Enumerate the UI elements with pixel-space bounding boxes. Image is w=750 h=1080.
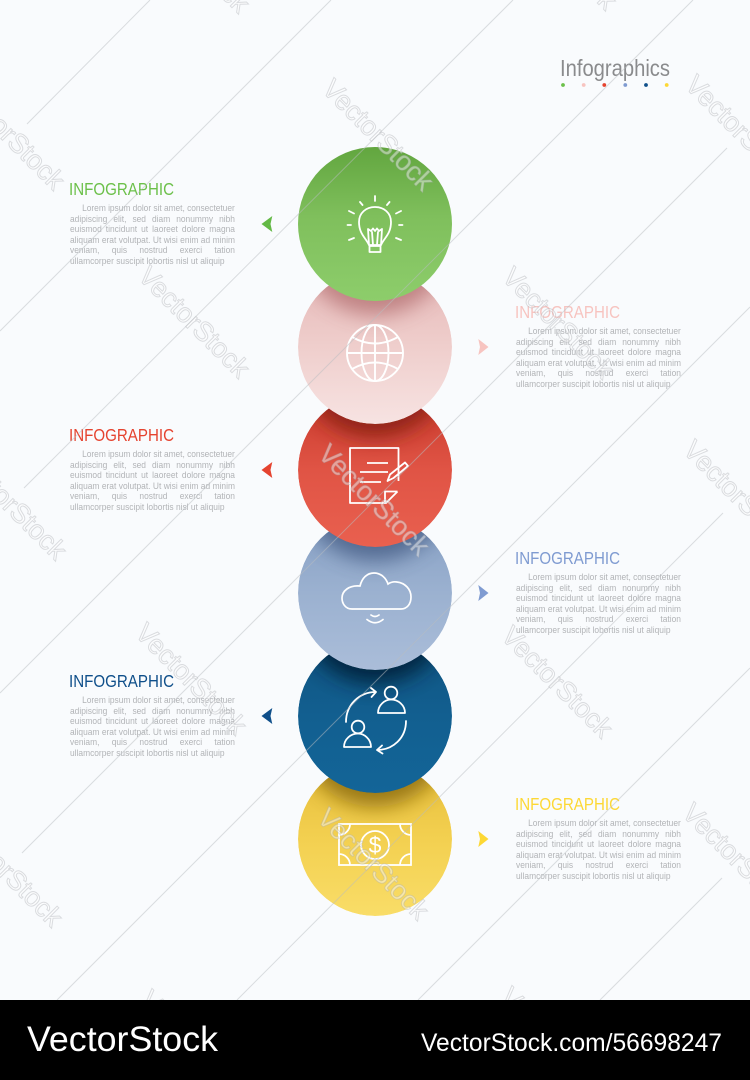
watermark overlay: VectorStock <box>312 438 436 562</box>
watermark overlay: VectorStock <box>129 617 253 741</box>
watermark overlay: VectorStock <box>316 73 440 197</box>
icon: light bulb <box>348 196 402 252</box>
text block: pink: euismod tincidunt ut laoreet dolore magna <box>516 347 680 357</box>
text block: yellow <box>514 794 681 881</box>
text block: yellow: aliquam erat volutpat. Ut wisi enim ad minim <box>516 850 680 860</box>
text block: red: euismod tincidunt ut laoreet dolore magna <box>70 470 234 480</box>
text: INFOGRAPHIC <box>514 794 620 814</box>
text block: pink: veniam, quis nostrud exerci tation <box>516 368 680 378</box>
text block: red: aliquam erat volutpat. Ut wisi enim ad minim <box>70 481 234 491</box>
text block: blue: aliquam erat volutpat. Ut wisi enim ad minim <box>516 604 680 614</box>
header title: Infographics <box>560 55 670 81</box>
icon: document with pencil <box>350 448 408 503</box>
footer bar: VectorStock <box>27 1020 219 1059</box>
text block: pink: ullamcorper suscipit lobortis nisl ut aliquip <box>516 379 670 389</box>
footer bar: VectorStock.com/56698247 <box>421 1029 722 1057</box>
text block: green: Lorem ipsum dolor sit amet, consectetuer <box>82 203 234 213</box>
circle: green bulb <box>298 147 452 301</box>
text block: pink: aliquam erat volutpat. Ut wisi enim ad minim <box>516 358 680 368</box>
text block: navy: veniam, quis nostrud exerci tation <box>70 737 234 747</box>
circle: red document <box>298 408 452 547</box>
text: INFOGRAPHIC <box>68 179 174 199</box>
arrow: blue <box>478 585 488 601</box>
text block: blue <box>514 548 681 635</box>
circle: yellow money <box>298 778 452 916</box>
text: INFOGRAPHIC <box>514 302 620 322</box>
arrow: yellow <box>478 831 488 847</box>
text block: yellow: adipiscing elit, sed diam nonummy nibh <box>516 829 680 839</box>
text: INFOGRAPHIC <box>68 671 174 691</box>
text block: yellow: Lorem ipsum dolor sit amet, consectetuer <box>528 818 680 828</box>
text block: pink: Lorem ipsum dolor sit amet, consectetuer <box>528 326 680 336</box>
text block: navy <box>68 671 235 758</box>
circle: blue cloud <box>298 532 452 670</box>
text block: blue: adipiscing elit, sed diam nonummy nibh <box>516 583 680 593</box>
text block: blue: euismod tincidunt ut laoreet dolore magna <box>516 593 680 603</box>
text block: green <box>68 179 235 266</box>
text block: green: veniam, quis nostrud exerci tation <box>70 245 234 255</box>
text: INFOGRAPHIC <box>68 425 174 445</box>
circle: pink globe <box>298 286 452 424</box>
footer bar <box>0 1000 750 1080</box>
text block: navy: aliquam erat volutpat. Ut wisi enim ad minim <box>70 727 234 737</box>
icon: banknote <box>339 824 411 865</box>
watermark overlay: VectorStock <box>495 620 619 744</box>
icon: cloud <box>342 573 411 623</box>
text block: red <box>68 425 235 512</box>
watermark overlay: VectorStock <box>311 802 435 926</box>
text block: yellow: ullamcorper suscipit lobortis nisl ut aliquip <box>516 871 670 881</box>
text block: blue: veniam, quis nostrud exerci tation <box>516 614 680 624</box>
header colour dots <box>561 83 669 87</box>
icon: globe <box>347 325 403 381</box>
text block: navy: adipiscing elit, sed diam nonummy nibh <box>70 706 234 716</box>
text block: pink: adipiscing elit, sed diam nonummy nibh <box>516 337 680 347</box>
text block: red: ullamcorper suscipit lobortis nisl ut aliquip <box>70 502 224 512</box>
text block: red: Lorem ipsum dolor sit amet, consectetuer <box>82 449 234 459</box>
text block: yellow: euismod tincidunt ut laoreet dolore magna <box>516 839 680 849</box>
arrow: navy <box>262 708 272 724</box>
main circles column <box>262 59 670 916</box>
text block: yellow: veniam, quis nostrud exerci tation <box>516 860 680 870</box>
text block: green: ullamcorper suscipit lobortis nisl ut aliquip <box>70 256 224 266</box>
text block: navy: ullamcorper suscipit lobortis nisl ut aliquip <box>70 748 224 758</box>
text block: blue: ullamcorper suscipit lobortis nisl ut aliquip <box>516 625 670 635</box>
text block: red: adipiscing elit, sed diam nonummy nibh <box>70 460 234 470</box>
text block: red: veniam, quis nostrud exerci tation <box>70 491 234 501</box>
text block: blue: Lorem ipsum dolor sit amet, consectetuer <box>528 572 680 582</box>
watermark overlay: VectorStock <box>496 261 620 385</box>
circle: navy people <box>298 654 452 793</box>
text block: pink <box>514 302 681 389</box>
arrow: pink <box>478 339 488 355</box>
text block: green: euismod tincidunt ut laoreet dolore magna <box>70 224 234 234</box>
text block: green: adipiscing elit, sed diam nonummy nibh <box>70 214 234 224</box>
arrow: green <box>262 216 272 232</box>
icon: banknote: $ <box>369 832 382 858</box>
text: INFOGRAPHIC <box>514 548 620 568</box>
icon: people exchange <box>344 687 406 754</box>
text block: navy: euismod tincidunt ut laoreet dolore magna <box>70 716 234 726</box>
text block: green: aliquam erat volutpat. Ut wisi enim ad minim <box>70 235 234 245</box>
watermark overlay: VectorStock <box>132 260 256 384</box>
text block: navy: Lorem ipsum dolor sit amet, consectetuer <box>82 695 234 705</box>
arrow: red <box>262 462 272 478</box>
